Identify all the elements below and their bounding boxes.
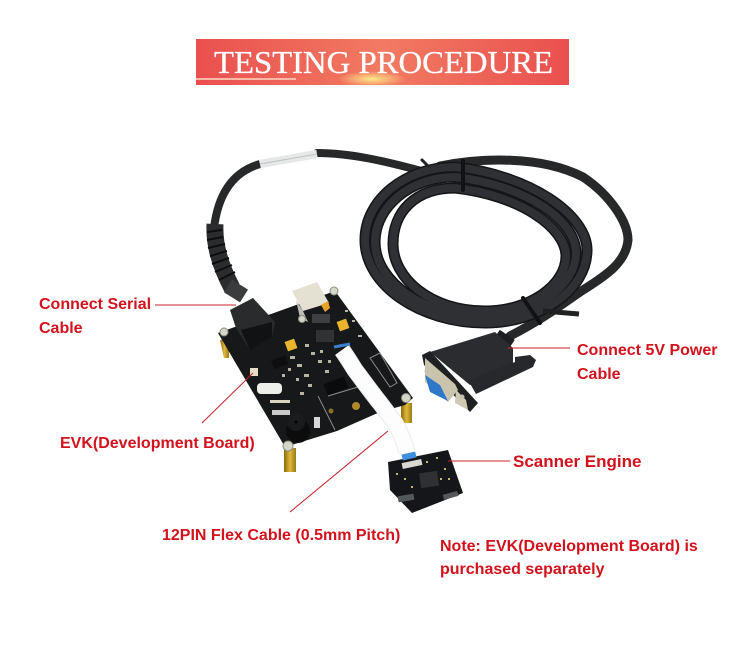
- note: purchased separately: [440, 561, 605, 578]
- label: connect 5V power cable: Connect 5V Power: [577, 342, 717, 359]
- label: connect serial cable: Cable: [39, 320, 83, 337]
- title text: TESTING PROCEDURE: [214, 44, 553, 80]
- title banner: [196, 39, 569, 87]
- scanner engine: [388, 450, 463, 513]
- db9 serial connector: [422, 332, 536, 412]
- leader lines: [155, 305, 570, 512]
- standoffs: [220, 338, 412, 472]
- screws: [220, 287, 410, 451]
- label: flex cable: 12PIN Flex Cable (0.5mm Pitch): [162, 527, 400, 544]
- flex cable: [334, 344, 407, 452]
- photo: cable to serial plug with sleeve and strain relief: [207, 154, 317, 296]
- large outer strand: [440, 160, 628, 336]
- coil strands: [365, 167, 587, 323]
- buzzer: [286, 413, 310, 443]
- pcb: [218, 291, 413, 447]
- note: Note: EVK(Development Board) is: [440, 538, 698, 555]
- usb connector: [292, 282, 330, 322]
- photo: cable coil: [317, 153, 628, 336]
- label: connect serial cable: Connect Serial: [39, 296, 151, 313]
- label: scanner engine: Scanner Engine: [513, 452, 641, 471]
- label: EVK development board: EVK(Development Board): [60, 435, 255, 452]
- label: connect 5V power cable: Cable: [577, 366, 621, 383]
- photo: evaluation board: [218, 282, 413, 472]
- rj plug block: [230, 298, 275, 350]
- feed cable: [317, 153, 425, 172]
- strain relief: [497, 334, 512, 344]
- cable ties: [463, 161, 540, 323]
- capacitors and components: [250, 310, 397, 430]
